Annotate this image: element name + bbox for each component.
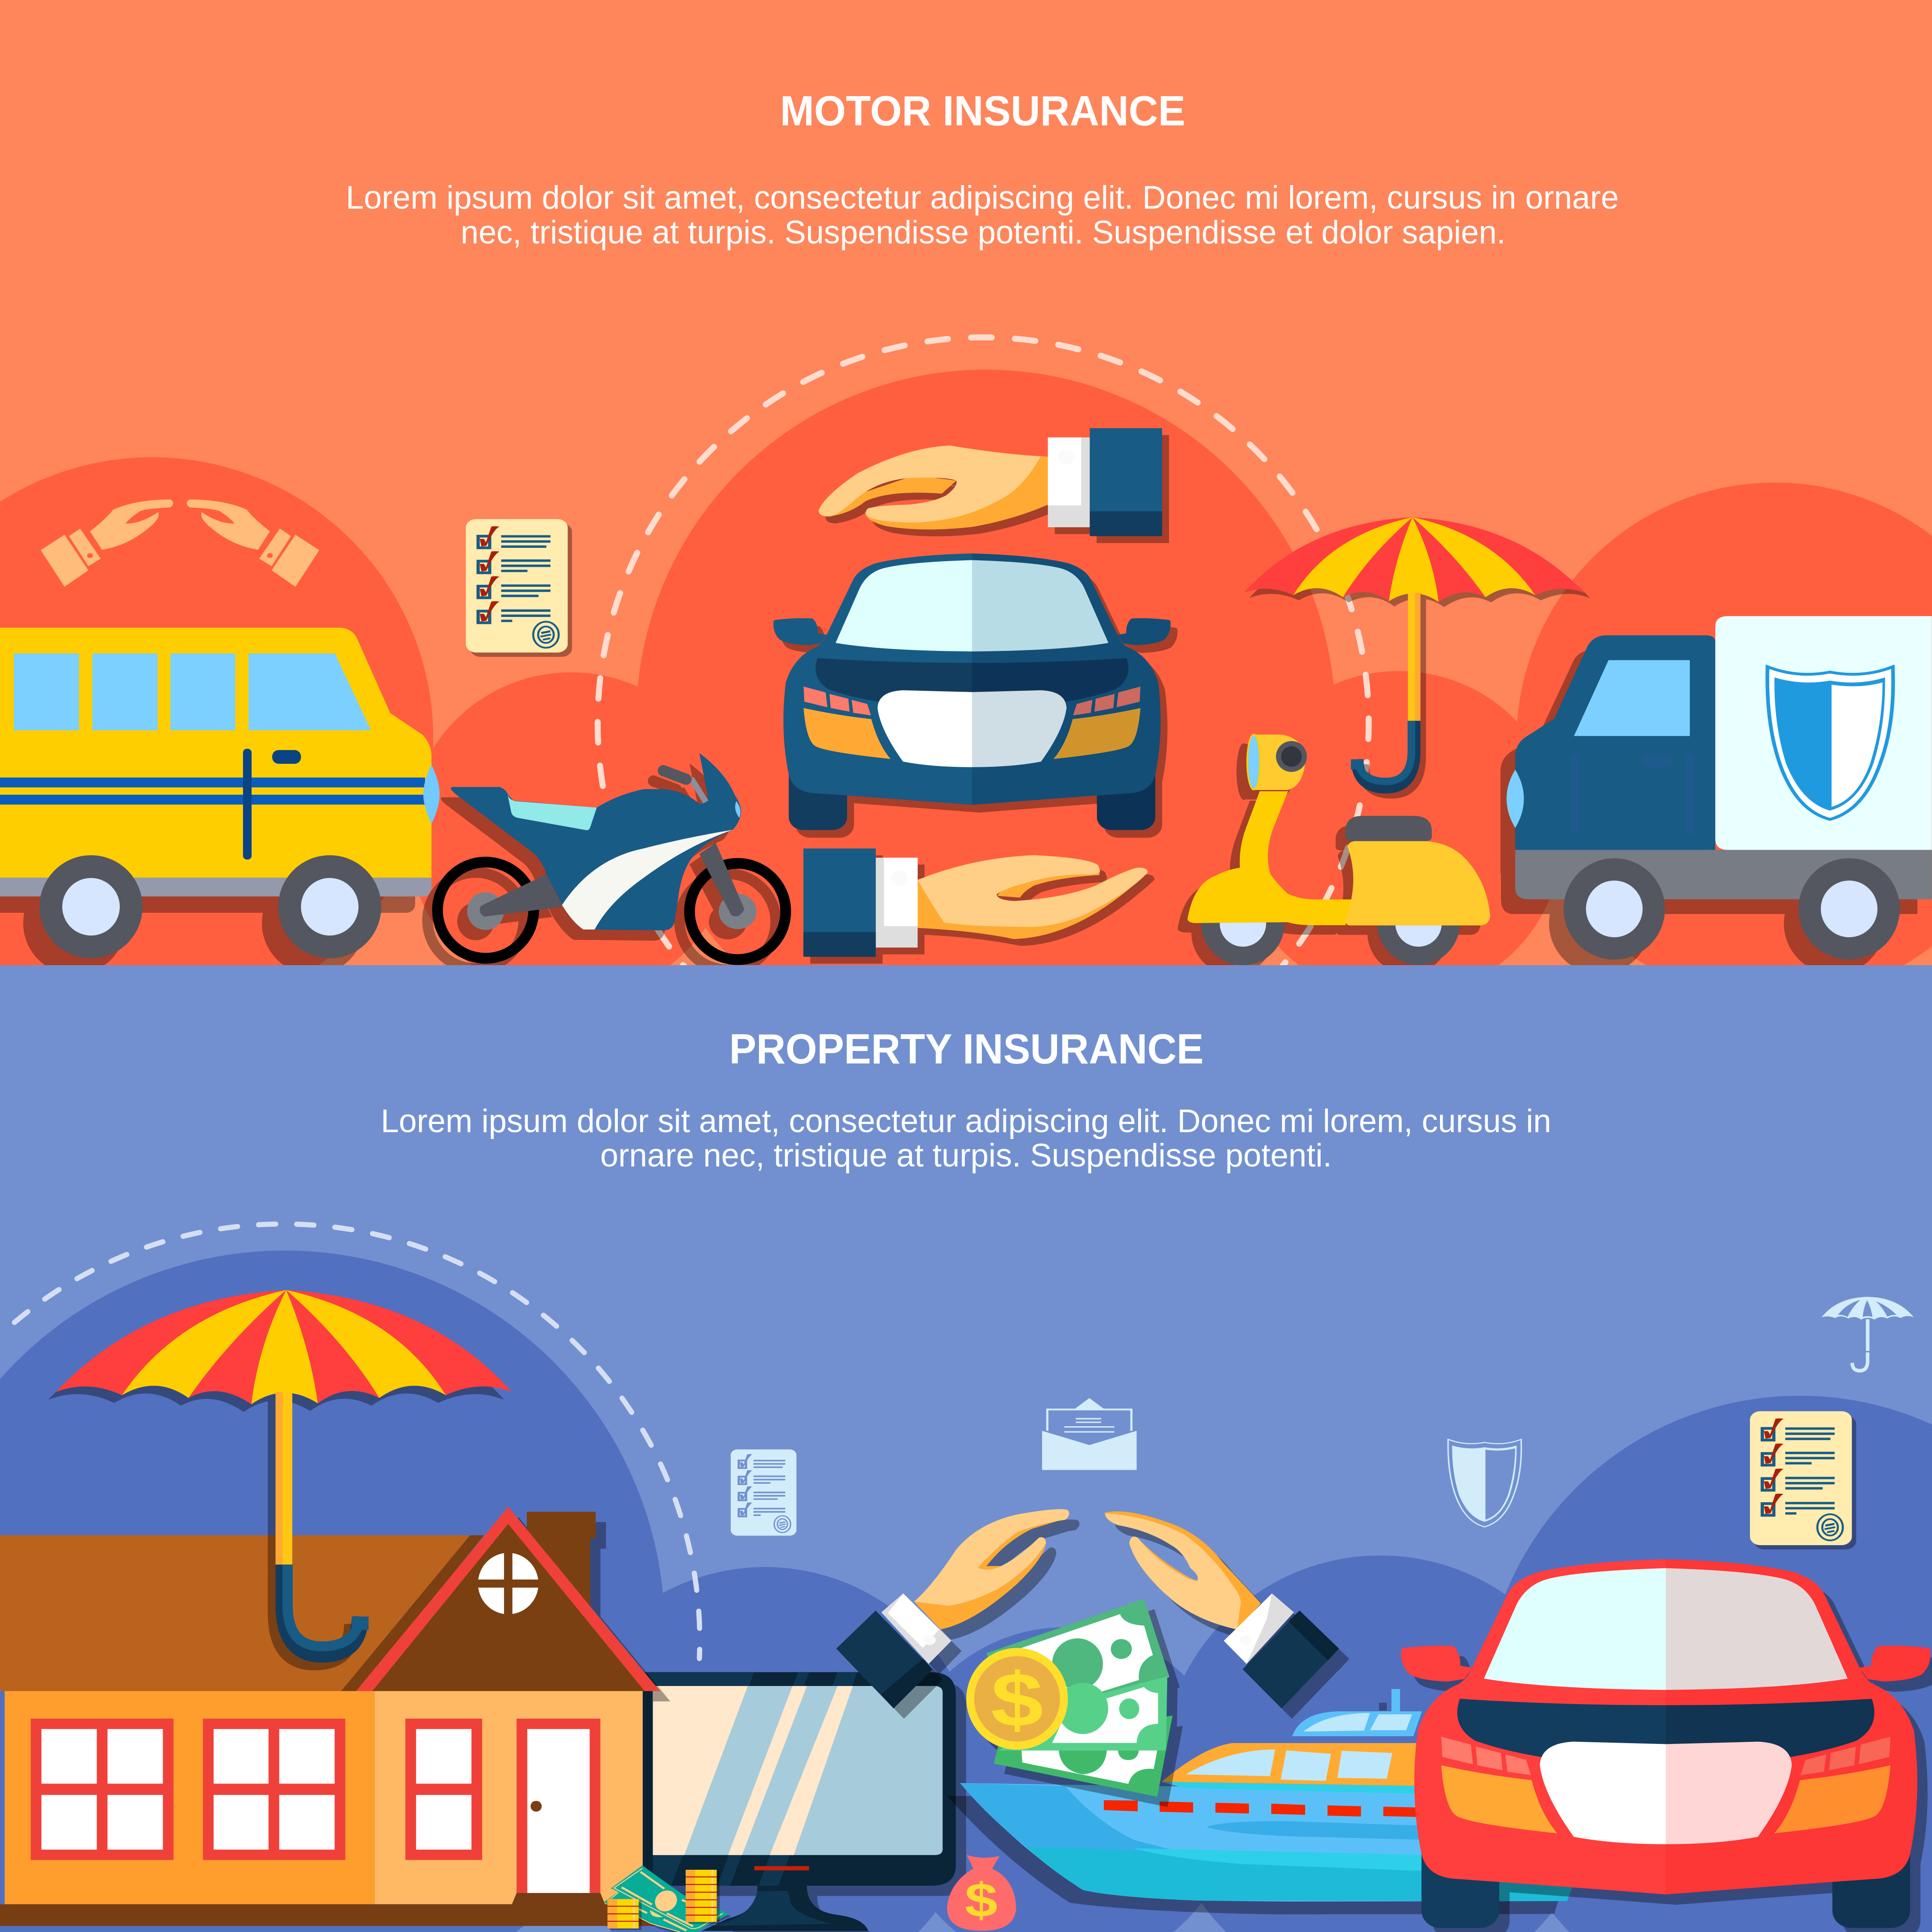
ship hull (960, 1783, 1589, 1902)
hand: property right (1105, 1511, 1349, 1719)
title: motor insurance: MOTOR INSURANCE (780, 87, 1185, 134)
car: blue front view (773, 553, 1178, 838)
icon: checklist document (466, 519, 572, 657)
truck (1501, 616, 1932, 974)
car: red front view (1401, 1559, 1931, 1928)
umbrella: property (48, 1290, 512, 1662)
hand: bottom protecting (803, 848, 1154, 964)
hand: property left (836, 1509, 1079, 1719)
ship (947, 1689, 1589, 1914)
cash and coin (966, 1599, 1173, 1797)
icon: large checklist (1750, 1411, 1856, 1549)
description: property insurance: ornare nec, tristique at turpis. Suspendisse potenti. (600, 1137, 1332, 1174)
ship portholes (1104, 1800, 1418, 1817)
scooter (1178, 734, 1490, 975)
icon: small pale checklist (731, 1449, 796, 1536)
top panel background (0, 0, 1932, 966)
bottom panel background (0, 965, 1932, 1932)
small cash and coin stacks (604, 1865, 731, 1932)
hand: top protecting (819, 428, 1169, 543)
cash and coin: $ (991, 1657, 1043, 1743)
motorcycle (428, 753, 786, 970)
dashed protection arc: property (0, 1224, 700, 1659)
money bag (947, 1855, 1016, 1931)
description: property insurance: Lorem ipsum dolor sit amet, consectetur adipiscing elit. Donec mi lorem, cursus in (381, 1103, 1551, 1139)
description: motor insurance: Lorem ipsum dolor sit amet, consectetur adipiscing elit. Donec mi lorem, cursus in ornare (346, 179, 1619, 216)
house front (0, 1507, 660, 1926)
icon: small protecting hands (41, 499, 319, 587)
bus (0, 628, 440, 975)
dashed protection arc: motor (598, 337, 1369, 966)
ship cabin (1162, 1689, 1422, 1794)
house with umbrella (0, 1290, 660, 1926)
back roof (0, 1535, 470, 1691)
money bag: $ (965, 1873, 998, 1927)
icon: envelope (1042, 1398, 1136, 1470)
icon: small pale umbrella (1822, 1297, 1914, 1371)
title: property insurance: PROPERTY INSURANCE (729, 1025, 1204, 1072)
bottom panel hills (0, 1251, 1932, 1932)
umbrella: motor (1244, 517, 1590, 793)
icon: pale shield (1448, 1440, 1521, 1527)
top panel hills (0, 370, 1932, 1069)
description: motor insurance: nec, tristique at turpis. Suspendisse potenti. Suspendisse et dolor sapien. (461, 214, 1506, 251)
computer monitor (643, 1672, 956, 1931)
